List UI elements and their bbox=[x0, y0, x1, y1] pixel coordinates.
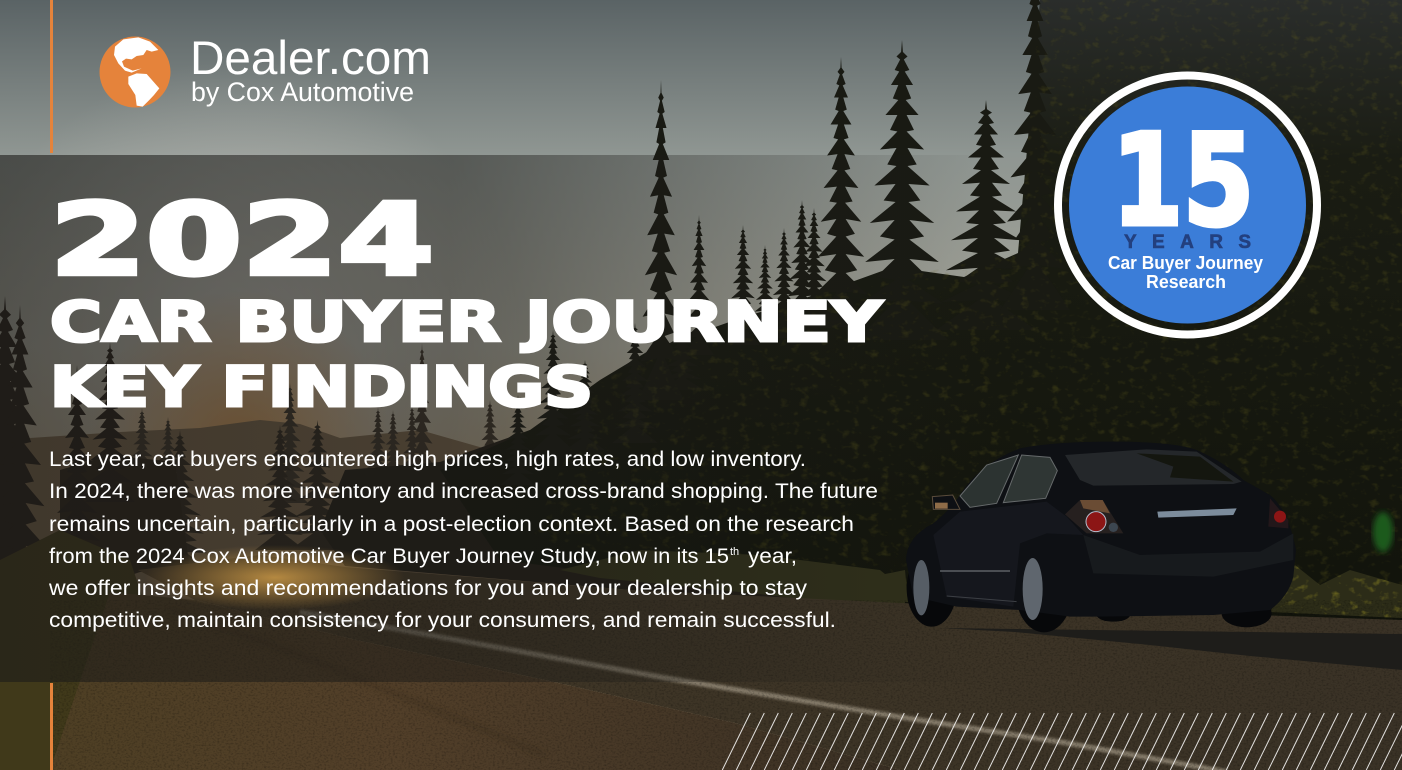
orange accent line bottom bbox=[50, 683, 53, 770]
intro paragraph: competitive, maintain consistency for your consumers, and remain successful. bbox=[49, 609, 836, 632]
icon: orange globe bbox=[100, 36, 170, 108]
badge: 15 years: Research bbox=[1146, 272, 1226, 292]
title year: 2024 bbox=[50, 183, 434, 298]
intro paragraph: th bbox=[730, 546, 739, 558]
intro paragraph: from the 2024 Cox Automotive Car Buyer Journey Study, now in its 15 bbox=[49, 545, 729, 568]
far tree line bbox=[124, 343, 508, 510]
right bushes bbox=[1271, 565, 1402, 618]
foliage texture bbox=[500, 0, 1402, 620]
intro paragraph bbox=[48, 448, 878, 632]
badge number: 15 bbox=[1112, 107, 1254, 254]
intro paragraph: we offer insights and recommendations for you and your dealership to stay bbox=[48, 577, 808, 600]
right forest mass bbox=[440, 0, 1402, 640]
side windows bbox=[960, 455, 1018, 507]
sun glare on road bbox=[120, 535, 440, 620]
road edge stripe bbox=[300, 612, 1227, 770]
title line 2: KEY FINDINGS bbox=[50, 355, 593, 419]
wordmark: Dealer.com bbox=[190, 31, 431, 84]
badge: 15 years bbox=[1058, 76, 1317, 334]
intro paragraph: year, bbox=[748, 545, 797, 568]
body silhouette bbox=[906, 442, 1296, 617]
road surface bbox=[138, 555, 1402, 770]
intro paragraph: In 2024, there was more inventory and increased cross-brand shopping. The future bbox=[49, 480, 878, 503]
hedge lens flare bbox=[1373, 512, 1393, 552]
side trim bbox=[940, 569, 1010, 573]
title block bbox=[50, 183, 883, 419]
badge years: YEARS bbox=[1124, 232, 1251, 253]
side panel bbox=[933, 502, 1083, 607]
tyres bbox=[907, 550, 957, 627]
tagline: by Cox Automotive bbox=[191, 77, 414, 107]
title line 1: CAR BUYER JOURNEY bbox=[50, 290, 883, 354]
rear window bbox=[1065, 449, 1242, 486]
intro paragraph: Last year, car buyers encountered high prices, high rates, and low inventory. bbox=[49, 448, 806, 471]
logo: Dealer.com by Cox Automotive bbox=[100, 31, 431, 108]
left and lower forest bbox=[60, 455, 190, 600]
dark ruts in the dirt bbox=[170, 610, 545, 755]
road grain bbox=[50, 600, 1402, 770]
photo: dark sedan bbox=[906, 442, 1296, 632]
dirt shoulder bbox=[50, 592, 900, 770]
chrome trunk bar bbox=[1157, 508, 1237, 518]
left tail light bbox=[1065, 500, 1123, 533]
car shadow bbox=[940, 628, 1402, 670]
orange accent line top bbox=[50, 0, 53, 153]
distant hill bbox=[0, 420, 560, 600]
badge caption: Car Buyer Journey bbox=[1108, 253, 1263, 273]
tall pines against the sky bbox=[500, 0, 1070, 485]
right tail light bbox=[1268, 498, 1288, 528]
wheel rims bbox=[913, 560, 929, 615]
mid-ground trees beside the sun gap bbox=[150, 420, 345, 570]
intro paragraph: remains uncertain, particularly in a post-election context. Based on the research bbox=[49, 513, 854, 536]
hatch pattern bottom right bbox=[722, 713, 1402, 770]
mirror bbox=[932, 495, 960, 509]
translucent dark panel bbox=[0, 155, 1000, 682]
left bushes bbox=[0, 530, 150, 770]
rear bumper bbox=[1083, 533, 1293, 577]
verge bushes bbox=[560, 550, 905, 612]
